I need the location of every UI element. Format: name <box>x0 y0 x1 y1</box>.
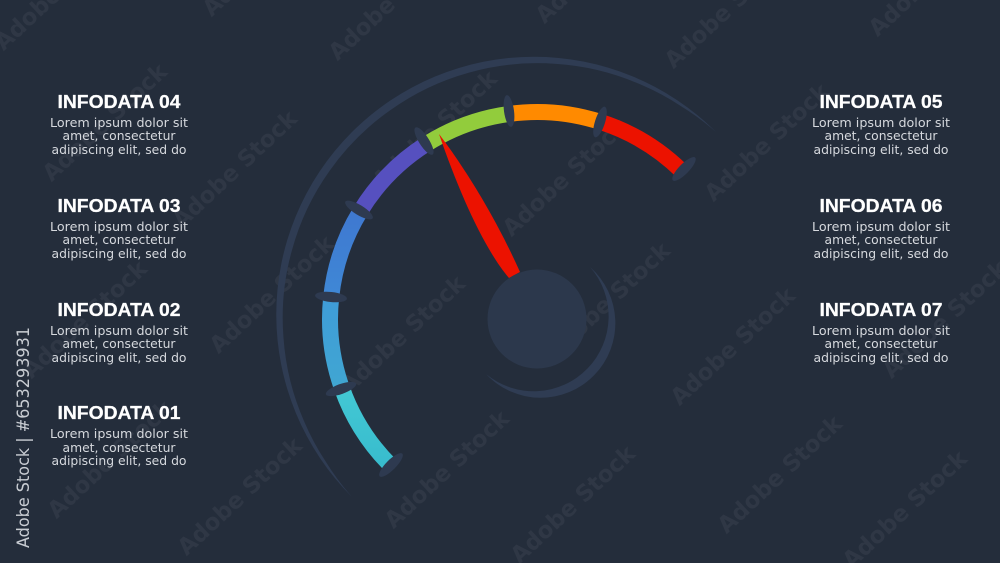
text block: INFODATA 01 <box>50 402 188 468</box>
text block: INFODATA 07: Lorem ipsum dolor sit <box>812 323 950 338</box>
watermarks: Adobe Stock <box>38 58 173 187</box>
text block: INFODATA 04: Lorem ipsum dolor sit <box>50 115 188 130</box>
segment 05 green <box>426 114 509 144</box>
text block: INFODATA 05 <box>812 91 950 157</box>
watermarks: Adobe Stock <box>666 282 801 411</box>
text block: INFODATA 03: amet, consectetur <box>62 232 176 247</box>
watermarks: Adobe Stock <box>380 405 515 534</box>
segment 03 blue <box>331 211 360 297</box>
watermarks: Adobe Stock <box>713 410 848 539</box>
text block: INFODATA 05: Lorem ipsum dolor sit <box>812 115 950 130</box>
watermarks: Adobe Stock <box>168 105 303 234</box>
stock id vertical text: Adobe Stock | #653293931 <box>14 327 34 548</box>
text block: INFODATA 05: adipiscing elit, sed do <box>814 142 948 157</box>
text block: INFODATA 04: adipiscing elit, sed do <box>52 142 186 157</box>
needle <box>439 134 520 278</box>
text block: INFODATA 07: amet, consectetur <box>824 336 938 351</box>
text block: INFODATA 02: adipiscing elit, sed do <box>52 350 186 365</box>
watermarks: Adobe Stock <box>18 255 153 384</box>
text block: INFODATA 01: amet, consectetur <box>62 440 176 455</box>
text block: INFODATA 01: INFODATA 01 <box>58 402 180 423</box>
segment 07 red <box>600 122 682 171</box>
text block: INFODATA 07: adipiscing elit, sed do <box>814 350 948 365</box>
text block: INFODATA 06 <box>812 195 950 261</box>
watermarks: Adobe Stock <box>700 78 835 207</box>
segment separators <box>315 94 699 480</box>
text block: INFODATA 05: INFODATA 05 <box>820 91 942 112</box>
watermarks: Adobe Stock <box>43 395 178 524</box>
watermarks: Adobe Stock <box>205 230 340 359</box>
text block: INFODATA 03 <box>50 195 188 261</box>
watermarks: Adobe Stock <box>498 113 633 242</box>
text block: INFODATA 04: amet, consectetur <box>62 128 176 143</box>
text block: INFODATA 02: Lorem ipsum dolor sit <box>50 323 188 338</box>
text block: INFODATA 07 <box>812 299 950 365</box>
watermarks: Adobe Stock <box>336 270 471 399</box>
text block: INFODATA 02: INFODATA 02 <box>58 299 180 320</box>
inner crescent <box>486 267 615 398</box>
text block: INFODATA 06: amet, consectetur <box>824 232 938 247</box>
hub circle <box>488 270 586 368</box>
text block: INFODATA 03: Lorem ipsum dolor sit <box>50 219 188 234</box>
text block: INFODATA 06: Lorem ipsum dolor sit <box>812 219 950 234</box>
text block: INFODATA 02 <box>50 299 188 365</box>
text block: INFODATA 03: adipiscing elit, sed do <box>52 246 186 261</box>
text block: INFODATA 04 <box>50 91 188 157</box>
text block: INFODATA 01: adipiscing elit, sed do <box>52 453 186 468</box>
watermarks: Adobe Stock <box>541 237 676 366</box>
gauge arc <box>330 112 682 465</box>
segment 01 teal <box>342 388 391 465</box>
watermarks: Adobe Stock <box>368 65 503 194</box>
text block: INFODATA 06: adipiscing elit, sed do <box>814 246 948 261</box>
segment 02 light blue <box>330 297 342 388</box>
segment 06 orange <box>509 112 600 122</box>
outer crescent arc <box>276 57 716 497</box>
segment 04 indigo <box>360 144 426 211</box>
text block: INFODATA 01: Lorem ipsum dolor sit <box>50 426 188 441</box>
text block: INFODATA 04: INFODATA 04 <box>58 91 181 112</box>
watermarks: Adobe Stock <box>173 432 308 561</box>
text block: INFODATA 02: amet, consectetur <box>62 336 176 351</box>
text block: INFODATA 07: INFODATA 07 <box>820 299 942 320</box>
text block: INFODATA 06: INFODATA 06 <box>820 195 942 216</box>
text block: INFODATA 03: INFODATA 03 <box>58 195 180 216</box>
text block: INFODATA 05: amet, consectetur <box>824 128 938 143</box>
